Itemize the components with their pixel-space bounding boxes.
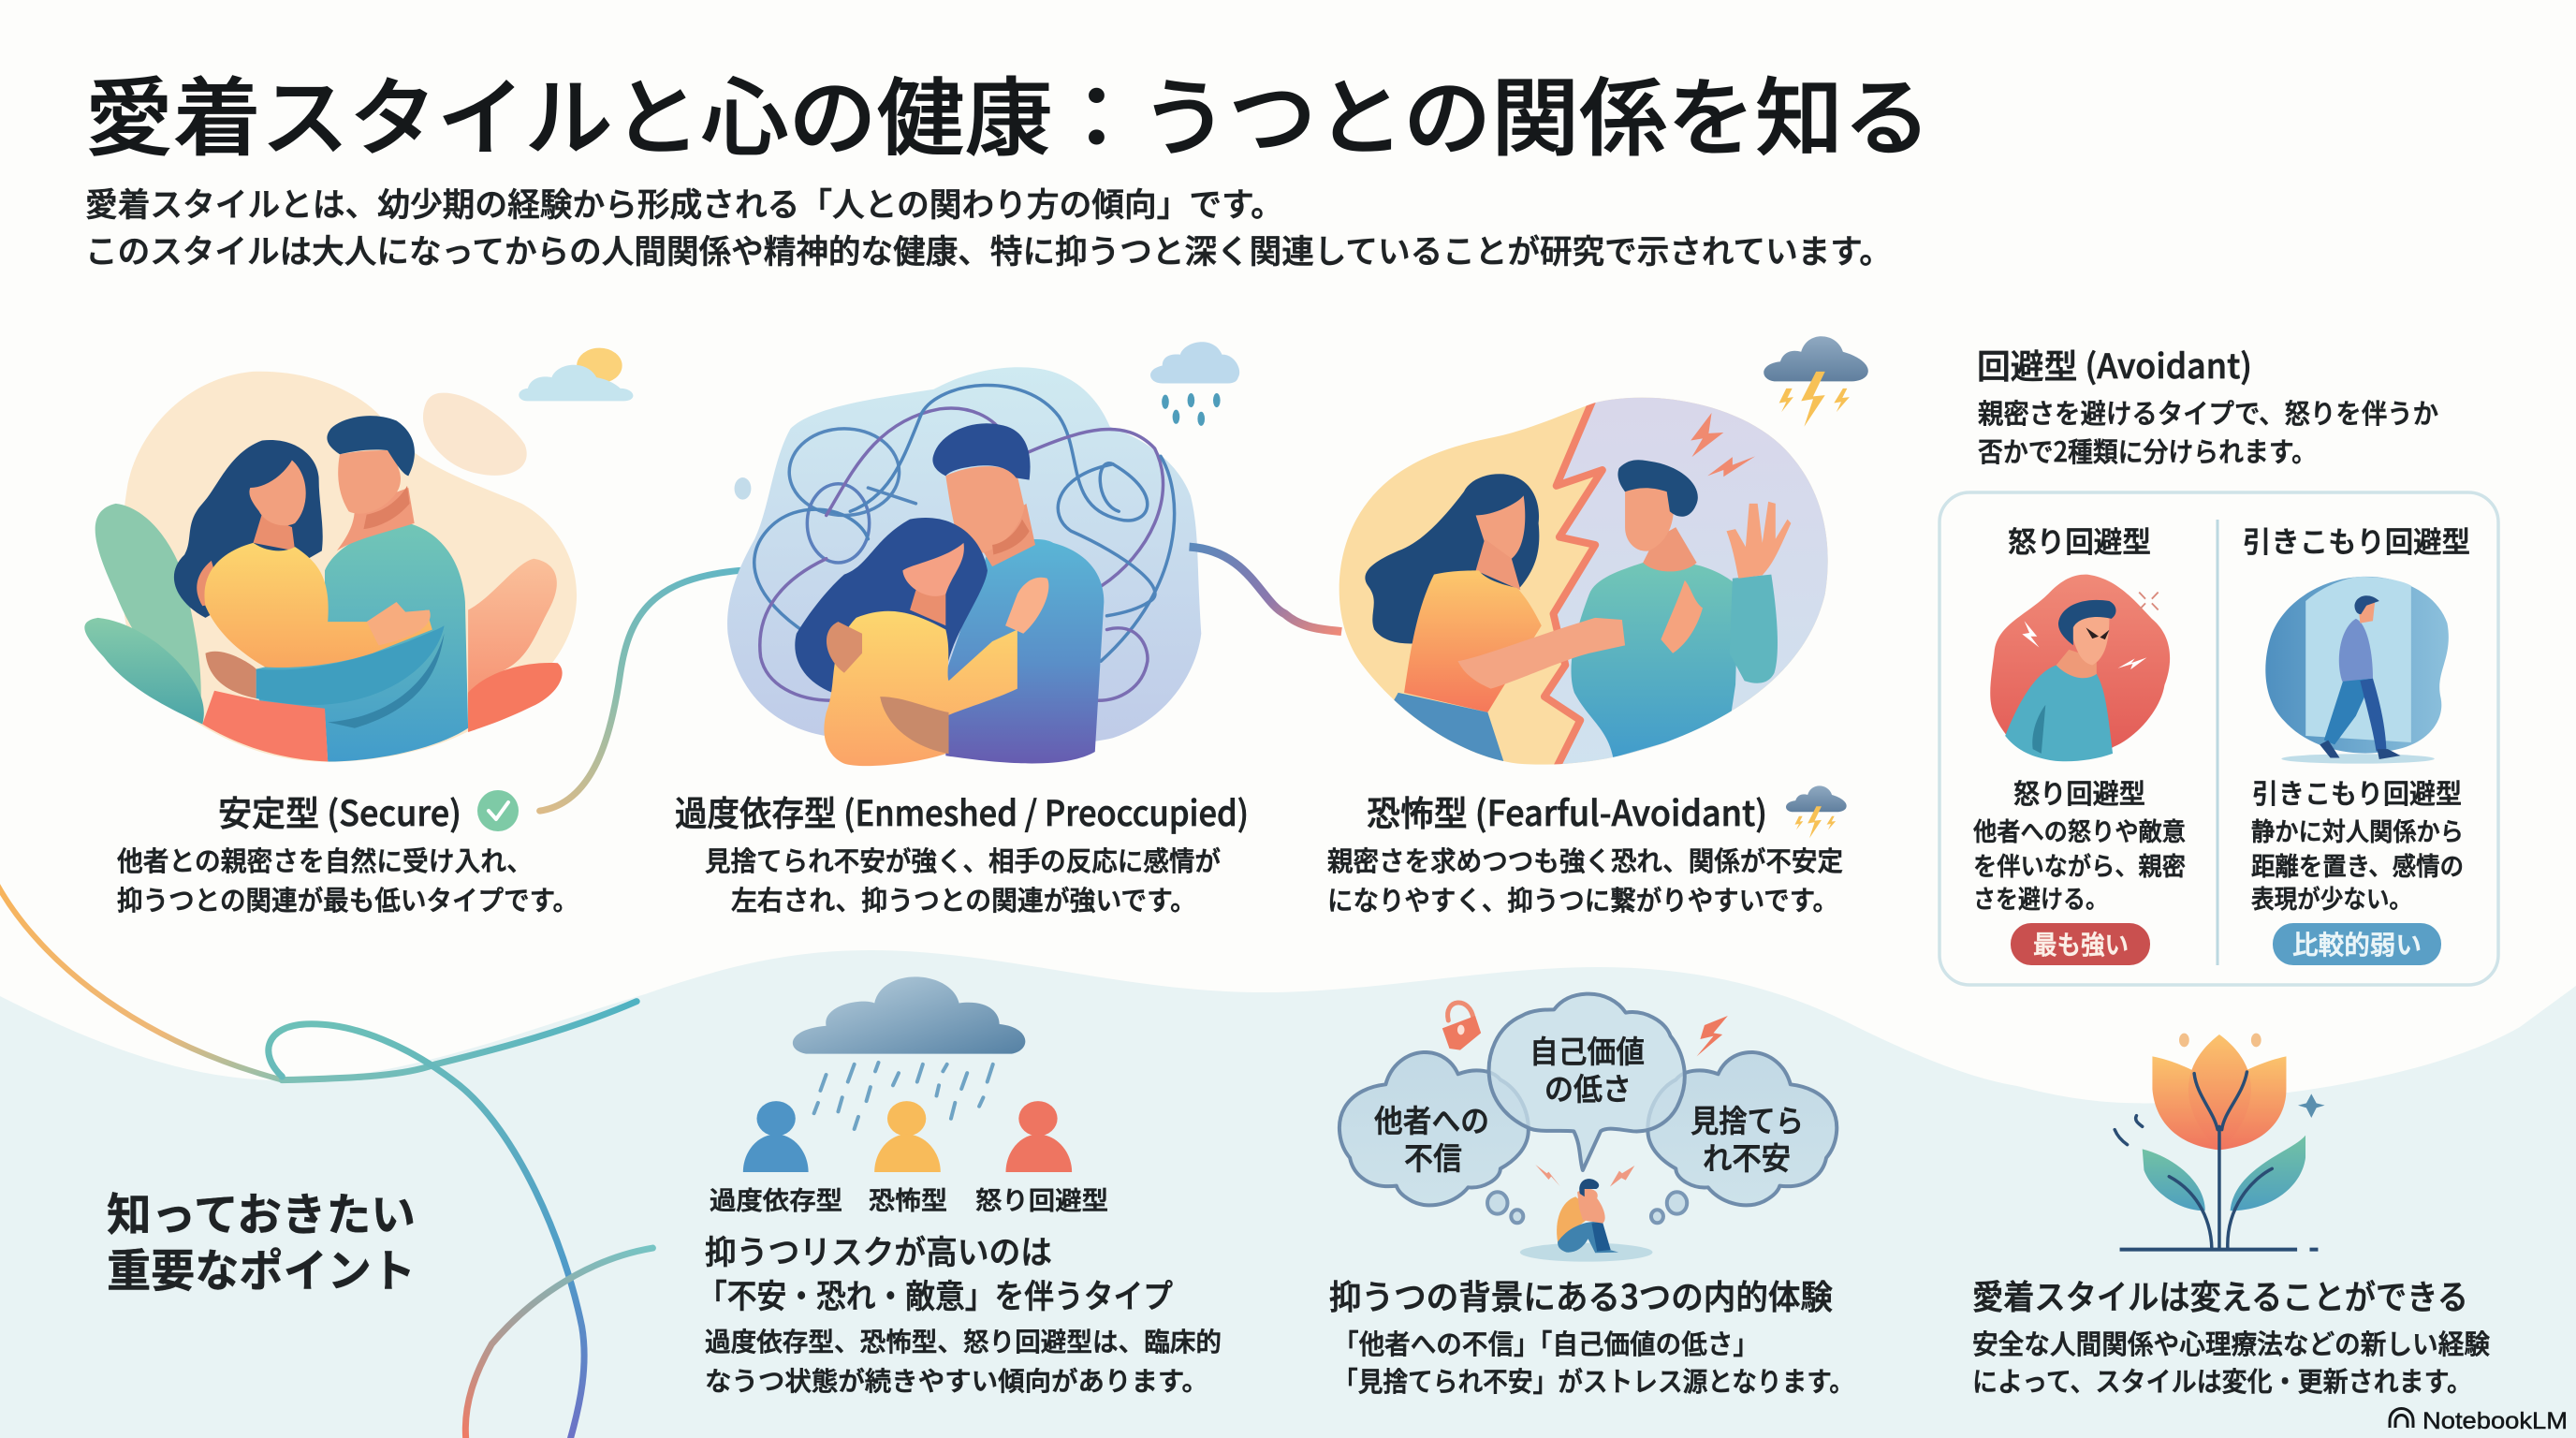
text: avoidant description xyxy=(1978,392,2438,470)
sun and cloud icon xyxy=(519,348,633,401)
text: inner experiences description: 「他者への不信」「自己価値の低さ」 xyxy=(1333,1323,1759,1362)
text: withdrawn avoidant description xyxy=(2251,812,2464,916)
storm cloud icon xyxy=(1764,336,1868,427)
intro text xyxy=(85,179,1892,273)
labels: three high-risk types xyxy=(710,1181,1108,1217)
illustration: angry man xyxy=(1990,575,2170,761)
text: anger avoidant description: を伴いながら、親密 xyxy=(1973,846,2186,883)
text: thought cloud labels: 自己価値 xyxy=(1530,1027,1645,1072)
illustration: three thought clouds xyxy=(1339,994,1837,1223)
illustration: sitting person xyxy=(1520,1179,1652,1262)
connector: secure to enmeshed xyxy=(540,570,739,811)
icon: small storm cloud xyxy=(1786,785,1847,838)
illustration: enmeshed couple xyxy=(727,367,1201,766)
labels: three high-risk types: 怒り回避型 xyxy=(975,1181,1108,1217)
text: thought cloud labels: 他者への xyxy=(1374,1096,1489,1141)
labels: three high-risk types: 過度依存型 xyxy=(710,1181,842,1217)
text: withdrawn avoidant description: 静かに対人関係から xyxy=(2251,812,2464,848)
text: secure description: 他者との親密さを自然に受け入れ、 xyxy=(117,840,533,879)
heading: key points xyxy=(107,1178,416,1299)
text: high risk description: 過度依存型、恐怖型、怒り回避型は、臨床的 xyxy=(705,1322,1222,1359)
illustration: growing flower xyxy=(2115,1034,2325,1252)
heading: key points: 重要なポイント xyxy=(107,1234,416,1299)
title: 愛着スタイルと心の健康：うつとの関係を知る xyxy=(85,50,1931,173)
intro text: このスタイルは大人になってからの人間関係や精神的な健康、特に抑うつと深く関連していることが研究で示されています。 xyxy=(85,226,1892,273)
illustration: secure couple xyxy=(84,372,577,762)
text: fearful description: になりやすく、抑うつに繋がりやすいです。 xyxy=(1327,879,1838,918)
text: styles can change description xyxy=(1972,1323,2490,1400)
text: enmeshed description xyxy=(705,840,1221,918)
text: fearful description xyxy=(1327,840,1843,918)
heading: high risk types: 抑うつリスクが高いのは xyxy=(705,1226,1052,1274)
text: styles can change description: 安全な人間関係や心理療法などの新しい経験 xyxy=(1972,1323,2490,1362)
label: secure: 安定型 (Secure) xyxy=(218,785,461,836)
text: thought cloud labels xyxy=(1374,1027,1804,1179)
text: styles can change description: によって、スタイルは変化・更新されます。 xyxy=(1972,1360,2472,1400)
text: withdrawn avoidant description: 表現が少ない。 xyxy=(2251,879,2412,916)
rain cloud icon xyxy=(1150,342,1239,426)
text: high risk description xyxy=(705,1322,1222,1399)
text: anger avoidant description: さを避ける。 xyxy=(1973,879,2108,916)
heading: key points: 知っておきたい xyxy=(107,1178,416,1243)
pill: strongest xyxy=(2011,923,2150,965)
text: thought cloud labels: 見捨てら xyxy=(1690,1096,1804,1141)
subtype: anger avoidant: 怒り回避型 xyxy=(2008,519,2151,561)
text: secure description: 抑うつとの関連が最も低いタイプです。 xyxy=(117,879,578,918)
text: withdrawn avoidant description: 距離を置き、感情の xyxy=(2251,846,2464,883)
subtype: withdrawn avoidant: 引きこもり回避型 xyxy=(2252,772,2462,812)
heading: avoidant: 回避型 (Avoidant) xyxy=(1977,340,2252,389)
subtype: withdrawn avoidant: 引きこもり回避型 xyxy=(2243,519,2470,561)
illustration: fearful-avoidant couple xyxy=(1339,397,1828,765)
label: enmeshed: 過度依存型 (Enmeshed / Preoccupied) xyxy=(675,785,1249,836)
illustration: rain over three people xyxy=(743,976,1072,1172)
pill: relatively weak: 比較的弱い xyxy=(2292,925,2422,962)
text: inner experiences description: 「見捨てられ不安」がストレス源となります。 xyxy=(1333,1360,1854,1400)
subtype: withdrawn avoidant xyxy=(2243,519,2470,965)
text: thought cloud labels: 不信 xyxy=(1404,1134,1462,1179)
heading: high risk types: 「不安・恐れ・敵意」を伴うタイプ xyxy=(697,1270,1173,1318)
text: inner experiences description xyxy=(1333,1323,1854,1400)
subtype: anger avoidant xyxy=(1973,519,2186,965)
text: enmeshed description: 左右され、抑うつとの関連が強いです。 xyxy=(731,879,1196,918)
heading: inner experiences: 抑うつの背景にある3つの内的体験 xyxy=(1329,1270,1833,1319)
label: fearful-avoidant: 恐怖型 (Fearful-Avoidant) xyxy=(1367,785,1767,836)
text: thought cloud labels: の低さ xyxy=(1544,1064,1632,1109)
heading: high risk types xyxy=(697,1226,1173,1318)
bottom wave panel xyxy=(0,950,2576,1438)
subtype: anger avoidant: 怒り回避型 xyxy=(2013,772,2145,812)
text: avoidant description: 否かで2種類に分けられます。 xyxy=(1978,431,2317,470)
heading: styles can change: 愛着スタイルは変えることができる xyxy=(1972,1270,2468,1319)
text: secure description xyxy=(117,840,578,918)
pill: strongest: 最も強い xyxy=(2033,925,2129,962)
text: fearful description: 親密さを求めつつも強く恐れ、関係が不安定 xyxy=(1327,840,1843,879)
text: thought cloud labels: れ不安 xyxy=(1703,1134,1791,1179)
text: high risk description: なうつ状態が続きやすい傾向があります。 xyxy=(705,1361,1208,1399)
logo: NotebookLM: NotebookLM xyxy=(2422,1408,2568,1434)
panel: avoidant subtypes xyxy=(1939,492,2498,985)
decorative ribbon xyxy=(0,883,652,1438)
text: anger avoidant description xyxy=(1973,812,2186,916)
icon: lock and bolt xyxy=(1442,1003,1728,1187)
illustration: walking man xyxy=(2265,577,2449,764)
intro text: 愛着スタイルとは、幼少期の経験から形成される「人との関わり方の傾向」です。 xyxy=(85,179,1283,227)
text: avoidant description: 親密さを避けるタイプで、怒りを伴うか xyxy=(1978,392,2438,432)
connector: enmeshed to fearful xyxy=(1190,547,1341,632)
text: enmeshed description: 見捨てられ不安が強く、相手の反応に感情が xyxy=(705,840,1221,879)
icon: check mark xyxy=(477,790,519,831)
text: anger avoidant description: 他者への怒りや敵意 xyxy=(1973,812,2186,848)
pill: relatively weak xyxy=(2273,923,2441,965)
labels: three high-risk types: 恐怖型 xyxy=(869,1181,947,1217)
